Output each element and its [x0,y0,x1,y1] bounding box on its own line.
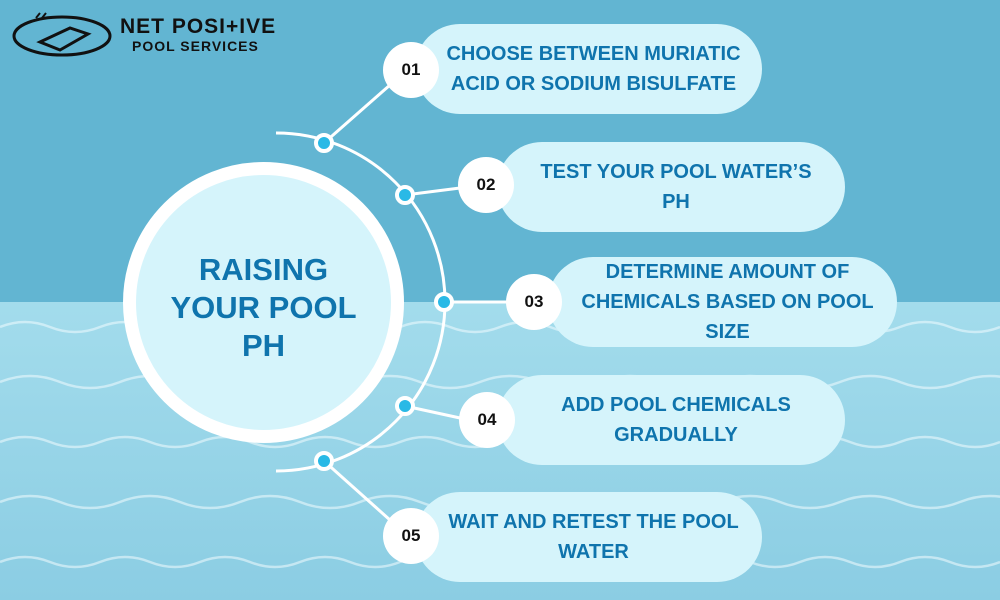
step 1 number [383,42,439,98]
step 3 [548,257,897,347]
step 5 number [383,508,439,564]
step 4 number [459,392,515,448]
step 1: CHOOSE BETWEEN MURIATIC [446,43,741,65]
step 5 [415,492,762,582]
main circle title: RAISING [199,252,328,286]
step 1: ACID OR SODIUM BISULFATE [451,73,736,95]
step 3: CHEMICALS BASED ON POOL [581,291,874,313]
step 2 number: 02 [477,175,495,194]
step 2 number [458,157,514,213]
step 5: WATER [558,541,629,563]
step 4: ADD POOL CHEMICALS [561,394,791,416]
step 2: TEST YOUR POOL WATER’S [540,161,812,183]
step 5 number: 05 [402,526,420,545]
main circle title: YOUR POOL [170,290,356,324]
step 1 number: 01 [402,60,420,79]
step 1 [415,24,762,114]
step 3: SIZE [705,321,750,343]
step 4 number: 04 [478,410,496,429]
step 4 [497,375,845,465]
step 3 number: 03 [525,292,543,311]
main circle title [123,162,404,443]
logo [12,12,276,56]
logo: NET POSI+IVE [120,15,276,38]
step 5: WAIT AND RETEST THE POOL [448,511,739,533]
logo: POOL SERVICES [132,38,259,54]
step 3: DETERMINE AMOUNT OF [606,261,849,283]
step 3 number [506,274,562,330]
water background [0,302,1000,600]
step 2 [497,142,845,232]
step 2: PH [662,191,690,213]
step 4: GRADUALLY [614,424,738,446]
main circle title: PH [242,328,285,362]
